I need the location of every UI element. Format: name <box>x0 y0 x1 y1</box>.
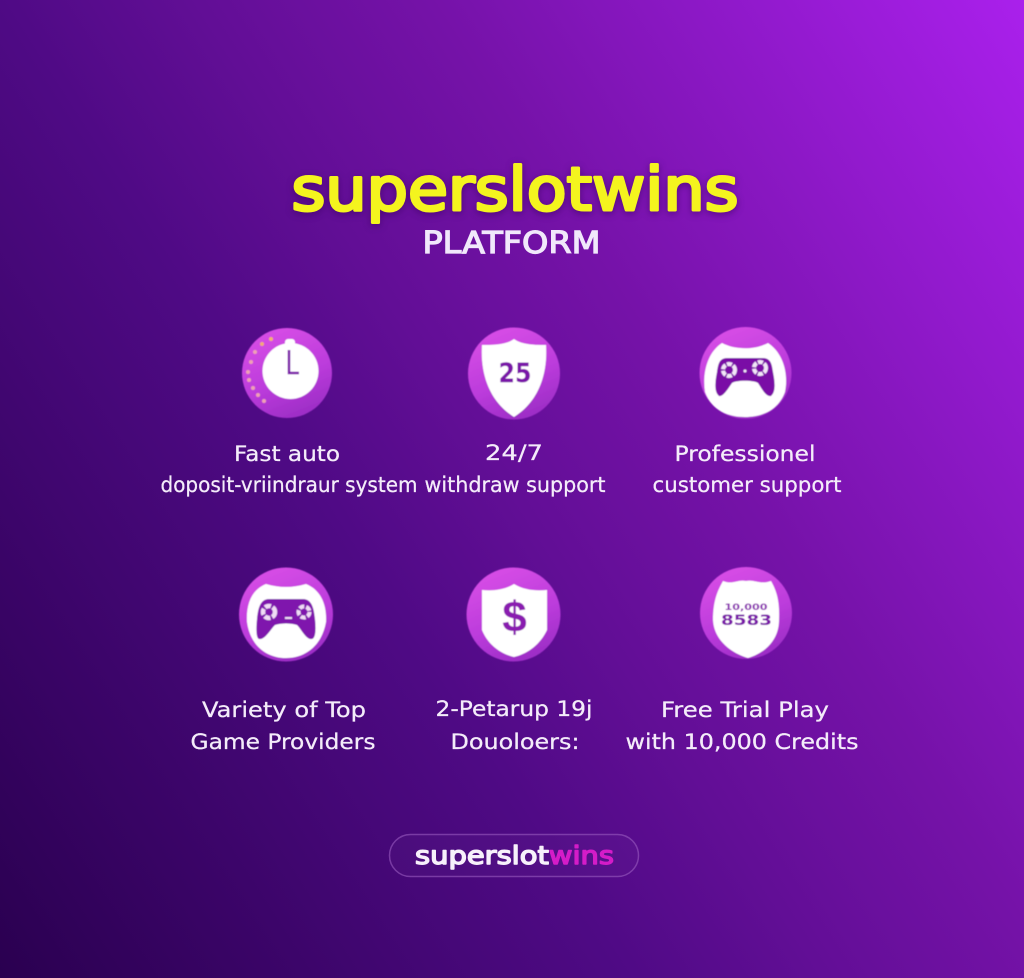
feature: shield with dollar <box>436 568 592 754</box>
caption: deposit-withdraw system: doposit-vriindraur system <box>160 473 418 497</box>
icon: credits badge: 8583 <box>721 613 772 629</box>
feature: variety of top game providers <box>190 568 376 754</box>
caption: fast auto: Fast auto <box>234 442 340 466</box>
feature: free trial play <box>626 567 858 754</box>
caption: with 10,000 credits: with 10,000 Credits <box>626 730 858 754</box>
badge wordmark: superslot wins <box>415 841 614 870</box>
caption: free trial play: Free Trial Play <box>661 698 829 722</box>
caption: line two: Douoloers: <box>450 730 580 754</box>
feature: 24/7 withdraw support <box>424 328 606 497</box>
feature: professional customer support <box>652 327 842 497</box>
caption: line one: 2-Petarup 19j <box>436 697 592 721</box>
icon: gamepad <box>700 327 792 419</box>
title: superslotwins <box>292 155 738 225</box>
icon: gamepad <box>239 568 333 662</box>
icon: stopwatch <box>242 328 332 418</box>
caption: variety of top: Variety of Top <box>202 698 366 722</box>
feature: fast auto deposit-withdraw system <box>160 328 418 497</box>
caption: withdraw support: withdraw support <box>424 473 606 497</box>
badge outline <box>390 834 638 876</box>
caption: customer support: customer support <box>652 473 842 497</box>
caption: professional: Professionel <box>674 442 816 466</box>
icon: credits badge: 10,000 <box>724 603 768 613</box>
caption: game providers: Game Providers <box>190 730 376 754</box>
title: superslotwins <box>292 157 738 227</box>
subtitle: PLATFORM <box>422 226 600 261</box>
icon: shield dollar <box>466 568 560 662</box>
caption: 24/7: 24/7 <box>485 441 543 465</box>
footer badge <box>390 834 638 876</box>
icon: credits badge <box>700 567 792 659</box>
icon: shield 25 <box>468 328 560 420</box>
icon: shield 25: 25 <box>498 358 532 389</box>
icon: shield dollar: $ <box>502 593 527 642</box>
